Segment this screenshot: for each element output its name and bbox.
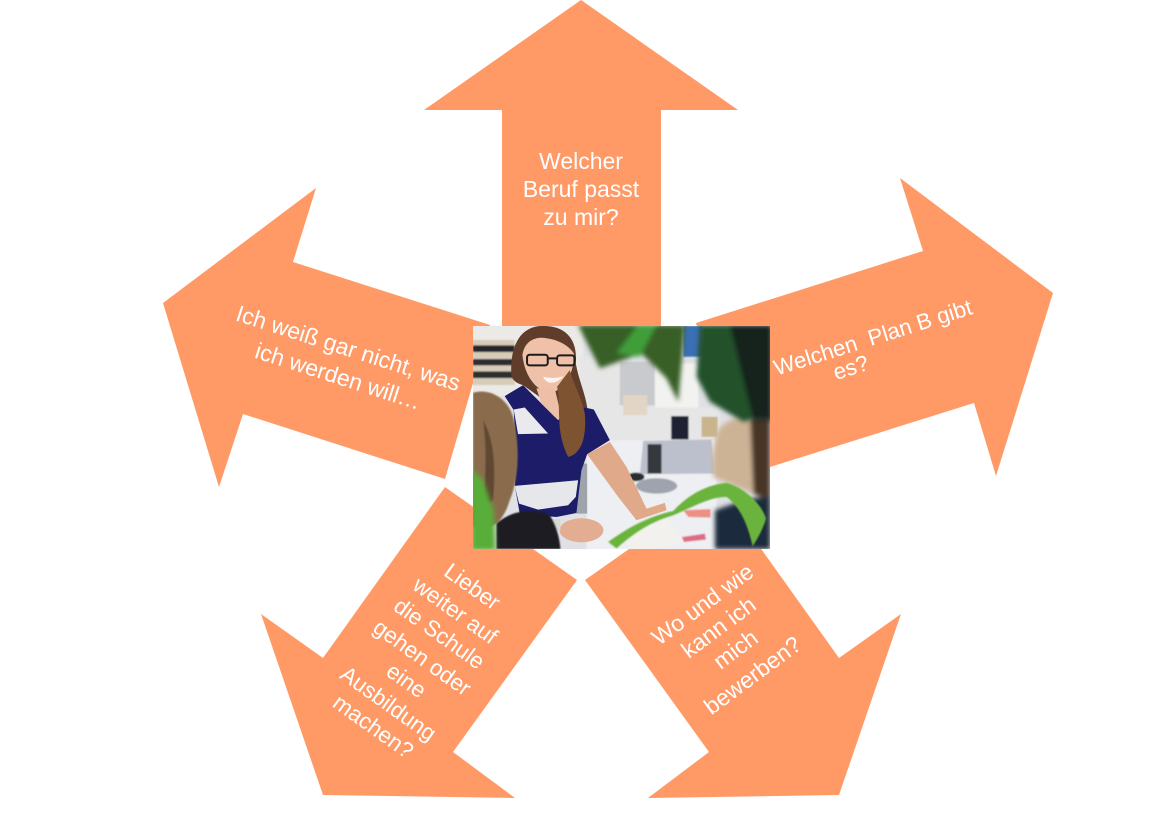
- glasses: [527, 355, 574, 365]
- text: Lieber weiter auf die Schule gehen oder eine Ausbildung machen: eine: [382, 658, 431, 703]
- text: Welcher Beruf passt zu mir: Welcher: [539, 148, 623, 174]
- text: Ich weiß gar nicht, was ich werden will: Ich weiß gar nicht, was: [233, 300, 464, 396]
- arrow: up, Welcher Beruf passt zu mir: [424, 0, 738, 326]
- text: Lieber weiter auf die Schule gehen oder eine Ausbildung machen: weiter auf: [408, 572, 503, 650]
- arrow: left, Ich weiß gar nicht: [163, 188, 490, 487]
- text: Wo und wie kann ich mich bewerben: bewerben?: [699, 631, 806, 719]
- text: Wo und wie kann ich mich bewerben: [647, 558, 806, 719]
- text: Welchen Plan B gibt es: Welchen Plan B gibt: [771, 294, 976, 381]
- text: Wo und wie kann ich mich bewerben: Wo und wie: [647, 558, 758, 650]
- leaves in foreground: [471, 325, 772, 550]
- person seated at right: [713, 417, 770, 549]
- paper on desk: [623, 517, 684, 549]
- text: Welcher Beruf passt zu mir: zu mir?: [543, 204, 619, 230]
- text: Wo und wie kann ich mich bewerben: kann ich: [676, 591, 761, 663]
- person seated at left: [473, 392, 560, 549]
- text: Lieber weiter auf die Schule gehen oder eine Ausbildung machen: Ausbildung: [336, 661, 441, 746]
- text: Lieber weiter auf die Schule gehen oder eine Ausbildung machen: [328, 558, 505, 764]
- text: Wo und wie kann ich mich bewerben: mich: [708, 624, 763, 674]
- arrow: down-left, weiter auf die Schule oder Ausbildung: [261, 487, 577, 798]
- text: Lieber weiter auf die Schule gehen oder eine Ausbildung machen: gehen oder: [369, 614, 476, 701]
- text: Lieber weiter auf die Schule gehen oder eine Ausbildung machen: Lieber: [440, 558, 505, 615]
- arrow: down-right, Wo und wie kann ich mich bewerben: [585, 487, 901, 798]
- text: Welcher Beruf passt zu mir: Beruf passt: [523, 176, 640, 202]
- text: Welchen Plan B gibt es: es?: [830, 350, 872, 385]
- woman: [505, 326, 667, 542]
- text: Lieber weiter auf die Schule gehen oder eine Ausbildung machen: machen?: [328, 690, 418, 764]
- text: Ich weiß gar nicht, was ich werden will: ich werden will…: [252, 337, 424, 415]
- text: Lieber weiter auf die Schule gehen oder eine Ausbildung machen: die Schule: [389, 593, 489, 674]
- arrow: right, Welchen Plan B gibt es: [696, 178, 1053, 476]
- text: Welcher Beruf passt zu mir: [523, 148, 640, 230]
- photo: smiling young woman at a desk with two visitors: [473, 326, 770, 549]
